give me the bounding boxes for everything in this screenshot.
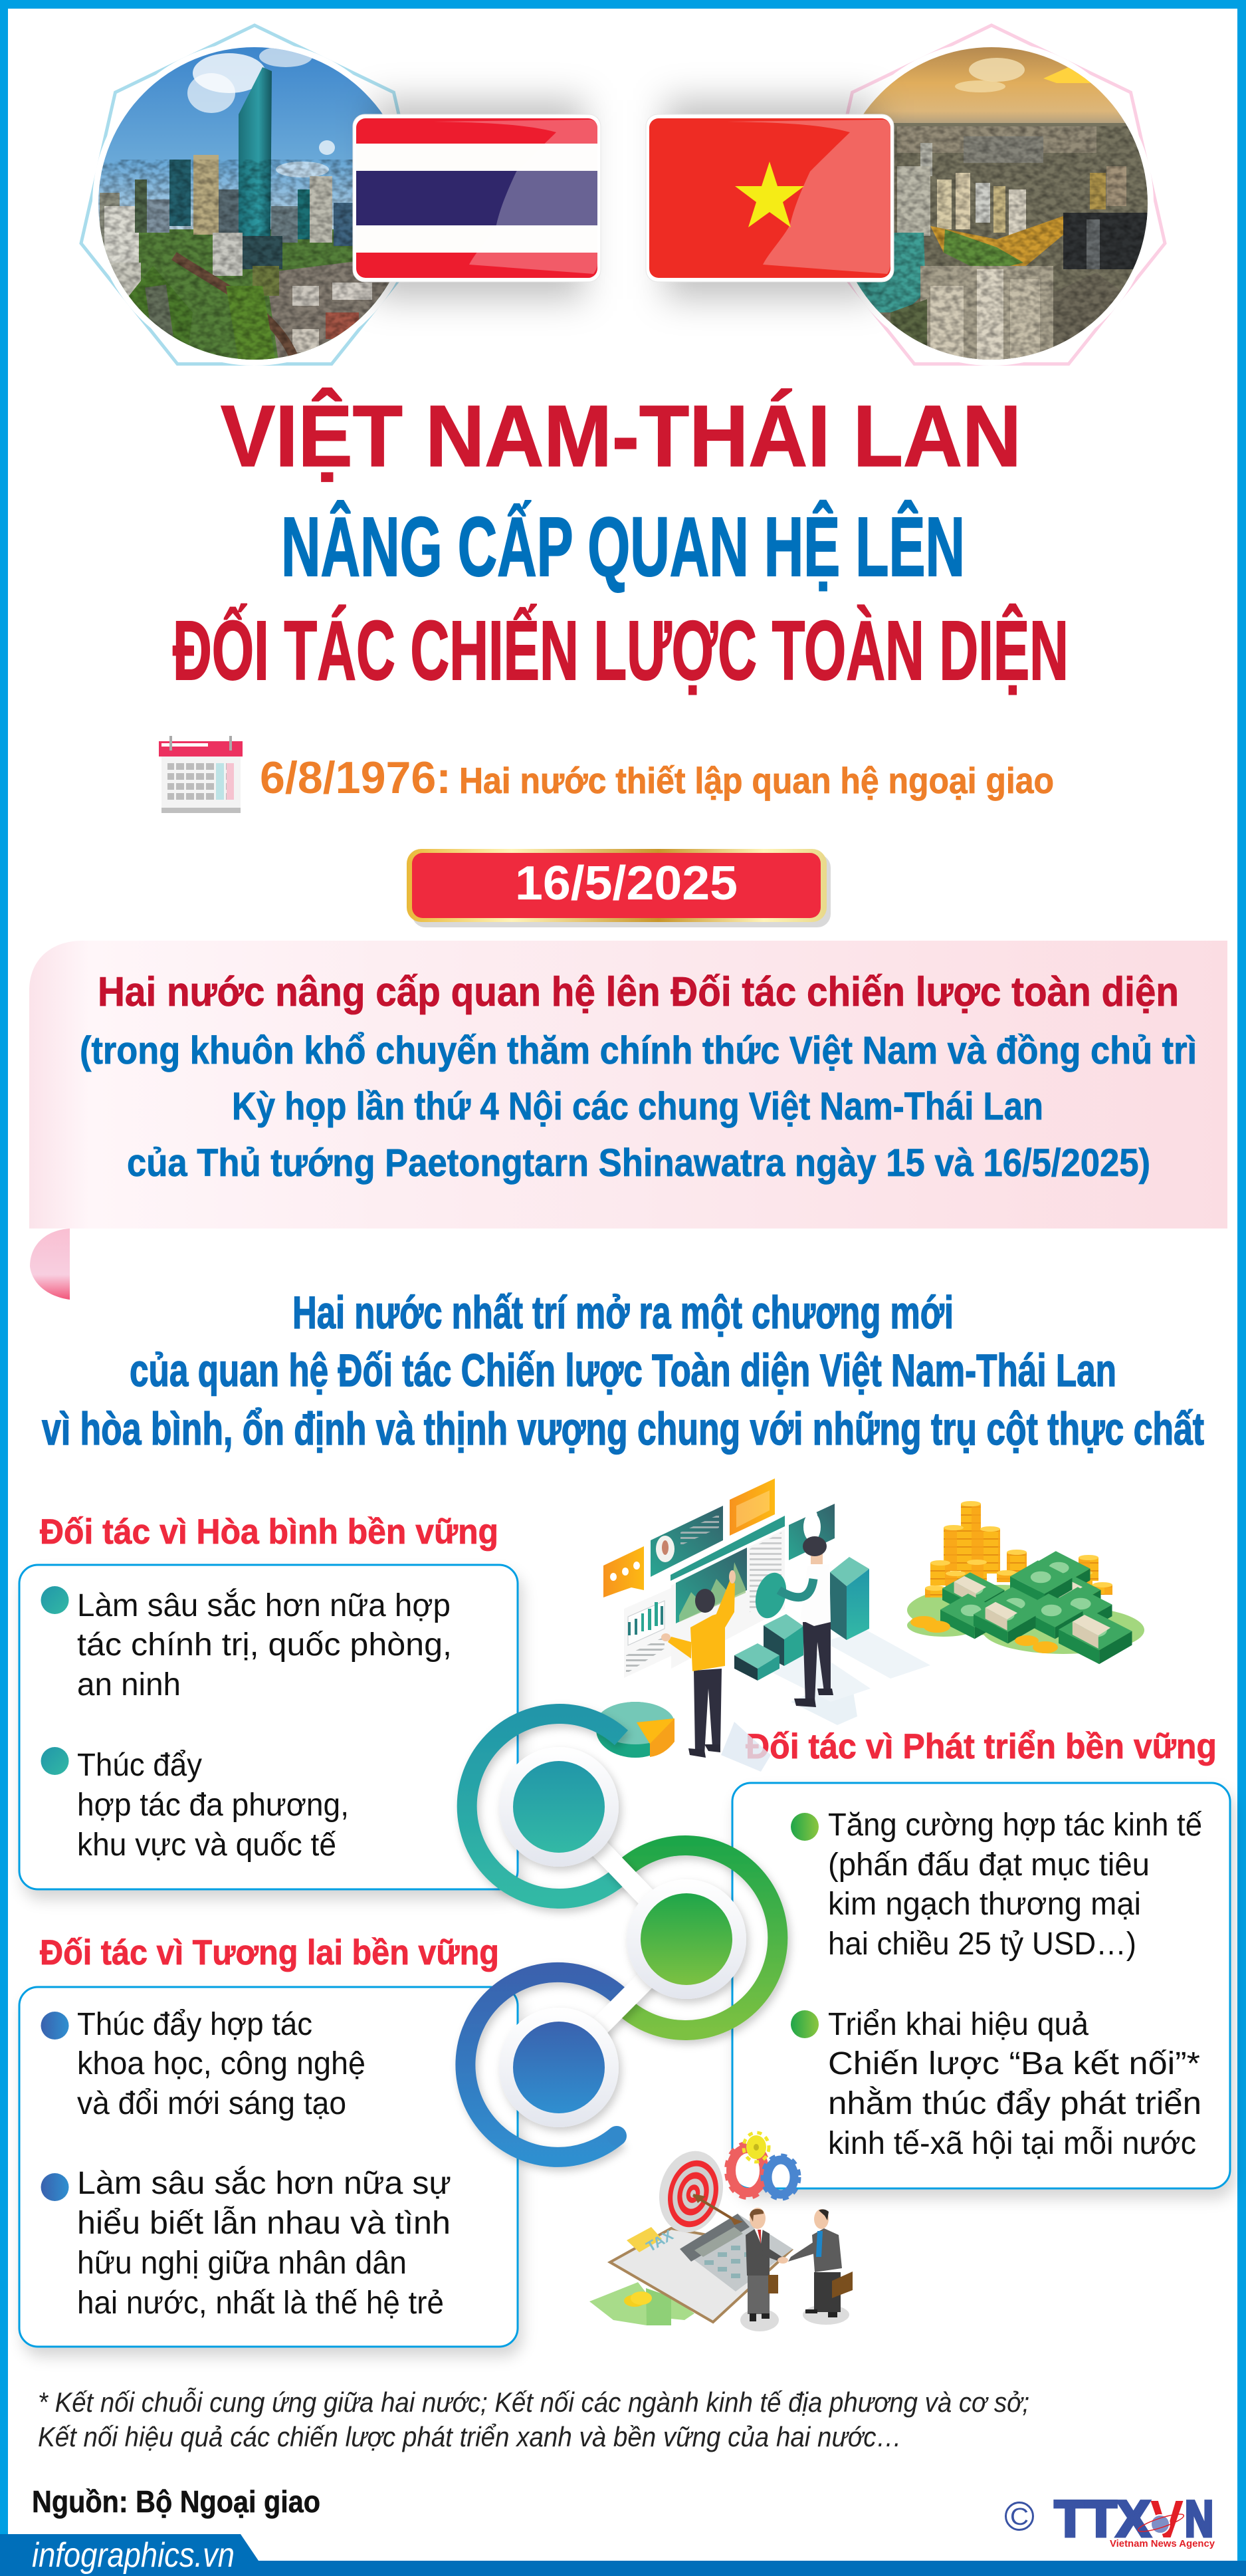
title: VIỆT NAM-THÁI LAN bbox=[221, 387, 1021, 485]
source: Nguồn: Bộ Ngoại giao bbox=[32, 2484, 320, 2519]
panel: development pillar bbox=[732, 1727, 1230, 2188]
arrow bbox=[693, 2194, 743, 2225]
ring: blue bbox=[465, 1972, 621, 2157]
milestone 1976: Hai nước thiết lập quan hệ ngoại giao bbox=[459, 760, 1054, 801]
flag: Thailand bbox=[353, 114, 601, 282]
pie chart card bbox=[751, 1569, 791, 1622]
person: yellow sweater bbox=[661, 1570, 736, 1758]
bullet item: three connections strategy: nhằm thúc đẩy phát triển bbox=[828, 2085, 1201, 2121]
bullet item: trade target: hai chiều 25 tỷ USD…) bbox=[828, 1927, 1136, 1962]
box: future bbox=[19, 1987, 518, 2347]
panel: future pillar bbox=[19, 1933, 518, 2347]
disc: blue bbox=[499, 2008, 619, 2127]
bullet item: politics and defence bbox=[41, 1586, 452, 1702]
date badge 16/5/2025 bbox=[407, 849, 831, 927]
footnote: * Kết nối chuỗi cung ứng giữa hai nước; Kết nối các ngành kinh tế địa phương và cơ sở; bbox=[38, 2387, 1029, 2418]
bullet item: mutual understanding: hai nước, nhất là thế hệ trẻ bbox=[77, 2285, 444, 2321]
bullet item: mutual understanding: hữu nghị giữa nhân dân bbox=[77, 2246, 407, 2281]
clipboard bbox=[610, 2226, 791, 2322]
bullet item: multilateral cooperation: Thúc đẩy bbox=[77, 1748, 202, 1783]
panel: upgrade announcement: của Thủ tướng Paetongtarn Shinawatra ngày 15 và 16/5/2025) bbox=[127, 1141, 1150, 1185]
dashboard main chart bbox=[671, 1516, 785, 1669]
panel: upgrade announcement bbox=[29, 941, 1227, 1300]
ring: green bbox=[623, 1845, 778, 2030]
logo: TTXVN copyright: Vietnam News Agency bbox=[1110, 2538, 1215, 2549]
bullet item: three connections strategy: Chiến lược “Ba kết nối”* bbox=[828, 2046, 1200, 2081]
person left bbox=[740, 2208, 784, 2331]
bullet item: science and technology bbox=[41, 2007, 365, 2121]
panel: peace pillar bbox=[19, 1512, 518, 1889]
person card bbox=[789, 1504, 835, 1560]
left chart card bbox=[624, 1587, 673, 1678]
ring cap: blue bbox=[607, 2126, 627, 2146]
cash bbox=[589, 2282, 694, 2325]
disc: teal bbox=[499, 1747, 619, 1867]
logo: TTXVN copyright: C bbox=[1010, 2503, 1029, 2530]
hero photo: Bangkok skyline bbox=[81, 25, 428, 366]
icon: calendar bbox=[159, 736, 243, 813]
subheading: new chapter: Hai nước nhất trí mở ra một chương mới bbox=[292, 1287, 954, 1338]
flag shadows bbox=[372, 100, 877, 299]
milestone 1976: 6/8/1976: bbox=[260, 753, 451, 803]
money bundles bbox=[940, 1551, 1132, 1664]
heading: future: Đối tác vì Tương lai bền vững bbox=[40, 1933, 499, 1972]
bullet item: multilateral cooperation: hợp tác đa phương, bbox=[77, 1788, 349, 1823]
logo: TTXVN copyright: N bbox=[1185, 2491, 1213, 2547]
bullet item: mutual understanding: hiểu biết lẫn nhau và tình bbox=[77, 2205, 451, 2241]
bullet item: mutual understanding: Làm sâu sắc hơn nữa sự bbox=[77, 2165, 451, 2201]
speech bubble card bbox=[603, 1546, 644, 1597]
bullet item: politics and defence: an ninh bbox=[77, 1667, 181, 1702]
loose coins bbox=[910, 1616, 1058, 1653]
profile card bbox=[651, 1506, 723, 1577]
title bbox=[173, 387, 1069, 697]
flag: Vietnam bbox=[646, 114, 894, 282]
panel: upgrade announcement: Hai nước nâng cấp quan hệ lên Đối tác chiến lược toàn diện bbox=[98, 969, 1179, 1015]
header: city photos and flags bbox=[81, 25, 1165, 366]
bar: small bbox=[734, 1643, 779, 1681]
bullet item: three connections strategy: kinh tế-xã hội tại mỗi nước bbox=[828, 2125, 1196, 2161]
heading: development: Đối tác vì Phát triển bền vững bbox=[746, 1727, 1217, 1766]
bar: tall bbox=[830, 1557, 869, 1640]
panel: upgrade announcement: Kỳ họp lần thứ 4 Nội các chung Việt Nam-Thái Lan bbox=[232, 1085, 1043, 1128]
hero photo: Hanoi skyline bbox=[818, 25, 1165, 366]
connectors bbox=[559, 1806, 686, 2067]
bullet item: trade target: (phấn đấu đạt mục tiêu bbox=[828, 1847, 1150, 1883]
bullet item: multilateral cooperation bbox=[41, 1747, 349, 1863]
milestone 1976 bbox=[260, 753, 1054, 803]
bullet item: mutual understanding bbox=[41, 2165, 451, 2321]
illustration: analysts with data dashboards bbox=[603, 1478, 930, 1772]
bullet item: science and technology: Thúc đẩy hợp tác bbox=[77, 2007, 312, 2042]
bullet item: three connections strategy bbox=[791, 2007, 1201, 2161]
clipboard: TAX bbox=[643, 2226, 676, 2255]
ring: teal bbox=[467, 1714, 621, 1899]
subheading: new chapter bbox=[42, 1287, 1204, 1455]
logo: TTXVN copyright: TTX bbox=[1055, 2491, 1150, 2547]
date badge 16/5/2025: 16/5/2025 bbox=[515, 857, 738, 910]
gears bbox=[726, 2133, 799, 2199]
illustration: tax, target and handshake bbox=[589, 2133, 853, 2331]
person: white shirt bbox=[779, 1536, 833, 1707]
coin stacks bbox=[925, 1501, 1112, 1597]
heading: peace: Đối tác vì Hòa bình bền vững bbox=[40, 1512, 498, 1552]
footnote bbox=[38, 2387, 1029, 2452]
footer bar with site tag bbox=[0, 2534, 1246, 2576]
footer bar with site tag: infographics.vn bbox=[32, 2536, 235, 2575]
target bbox=[651, 2144, 732, 2240]
box: development bbox=[732, 1783, 1230, 2188]
bullet item: politics and defence: Làm sâu sắc hơn nữa hợp bbox=[77, 1587, 451, 1623]
box: peace bbox=[19, 1565, 518, 1889]
footnote: Kết nối hiệu quả các chiến lược phát triển xanh và bền vững của hai nước… bbox=[38, 2421, 902, 2452]
bullet item: science and technology: và đổi mới sáng tạo bbox=[77, 2086, 346, 2121]
bullet item: trade target bbox=[791, 1808, 1202, 1962]
orange note card bbox=[730, 1478, 775, 1536]
bullet item: trade target: Tăng cường hợp tác kinh tế bbox=[828, 1808, 1202, 1843]
bullet item: science and technology: khoa học, công nghệ bbox=[77, 2046, 365, 2081]
disc: green bbox=[627, 1879, 746, 1999]
bullet item: multilateral cooperation: khu vực và quốc tế bbox=[77, 1827, 336, 1863]
bar: medium bbox=[764, 1614, 803, 1666]
bullet item: politics and defence: tác chính trị, quốc phòng, bbox=[77, 1627, 452, 1663]
calculator bbox=[680, 2214, 793, 2291]
logo: TTXVN copyright bbox=[1006, 2490, 1215, 2549]
bullet item: three connections strategy: Triển khai hiệu quả bbox=[828, 2007, 1089, 2042]
person right bbox=[778, 2209, 853, 2325]
logo: TTXVN copyright: V bbox=[1150, 2490, 1184, 2549]
illustration: coins and money bbox=[907, 1501, 1144, 1664]
pie chart bbox=[596, 1702, 675, 1758]
bullet item: trade target: kim ngạch thương mại bbox=[828, 1887, 1141, 1922]
connected circles diagram bbox=[465, 1714, 778, 2157]
